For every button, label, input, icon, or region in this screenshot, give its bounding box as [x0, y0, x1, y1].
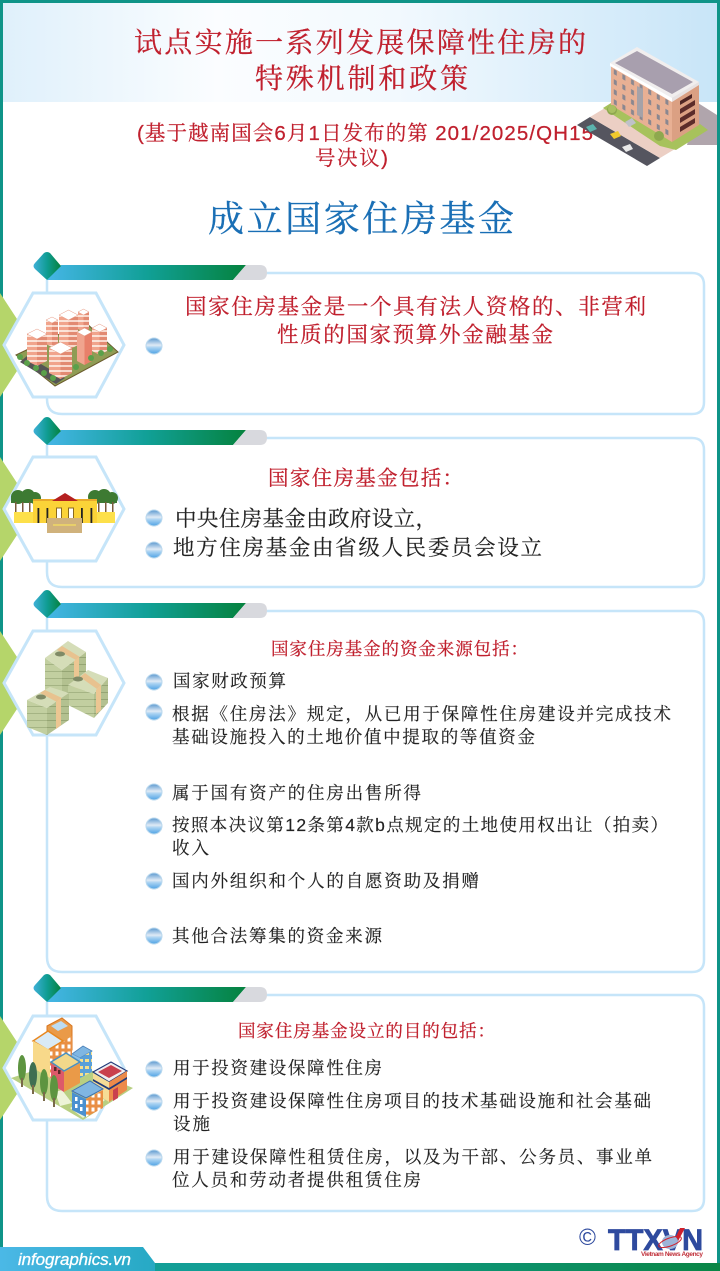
hexagon [4, 1016, 124, 1120]
section bar [34, 590, 267, 618]
heading text: 国家住房基金是一个具有法人资格的、非营利 [185, 290, 646, 321]
list: 按照本决议第12条第4款b点规定的土地使用权出让（拍卖） [172, 812, 668, 837]
title [134, 21, 586, 97]
list: 用于投资建设保障性住房 [173, 1055, 382, 1080]
icon: apartment building [577, 47, 717, 166]
hexagon [4, 457, 124, 561]
footer bar [0, 1263, 720, 1271]
heading text: 国家住房基金包括： [268, 461, 463, 491]
list: 根据《住房法》规定，从已用于保障性住房建设并完成技术 [172, 701, 671, 726]
list: 属于国有资产的住房出售所得 [172, 780, 421, 805]
icon: government building [11, 489, 118, 533]
green arrow [0, 457, 34, 561]
list [146, 502, 542, 562]
list: 位人员和劳动者提供租赁住房 [172, 1167, 421, 1192]
section bar [34, 252, 267, 280]
subtitle: 号决议) [315, 141, 388, 171]
subtitle [137, 116, 593, 171]
panel frame [47, 995, 704, 1211]
panel: legal status [0, 252, 704, 414]
panel: purposes [0, 974, 704, 1211]
list: 国家财政预算 [173, 668, 286, 693]
heading text [185, 290, 646, 349]
list: 地方住房基金由省级人民委员会设立 [173, 531, 542, 562]
logo: TTXVN: Vietnam News Agency [641, 1251, 703, 1258]
heading text: 国家住房基金的资金来源包括： [271, 636, 528, 661]
list: 设施 [173, 1111, 210, 1136]
hexagon [4, 631, 124, 735]
footer tab: infographics.vn [0, 1247, 155, 1271]
subtitle: (基于越南国会6月1日发布的第 201/2025/QH15 [137, 116, 593, 146]
list: 国内外组织和个人的自愿资助及捐赠 [172, 868, 479, 893]
heading text: 性质的国家预算外金融基金 [277, 318, 553, 349]
panel frame [47, 438, 704, 587]
section bar [34, 417, 267, 445]
bullet [146, 338, 162, 354]
list [146, 1055, 652, 1192]
footer tab: infographics.vn: infographics.vn [18, 1250, 131, 1269]
panel frame [47, 273, 704, 414]
icon: city blocks [16, 309, 118, 386]
list: 其他合法筹集的资金来源 [172, 923, 382, 948]
green arrow [0, 1016, 34, 1120]
list [146, 668, 671, 948]
copyright symbol: © [579, 1224, 596, 1250]
logo: TTXVN: TTXVN [608, 1224, 703, 1257]
panel: funding sources [0, 590, 704, 972]
list: 用于建设保障性租赁住房，以及为干部、公务员、事业单 [173, 1144, 652, 1169]
header banner [3, 3, 717, 102]
icon: cash stacks [27, 641, 108, 735]
green arrow [0, 631, 34, 735]
list: 用于投资建设保障性住房项目的技术基础设施和社会基础 [173, 1088, 651, 1113]
heading text: 国家住房基金设立的目的包括： [238, 1018, 495, 1043]
main heading: 成立国家住房基金 [208, 191, 514, 242]
panel: fund composition [0, 417, 704, 587]
title: 特殊机制和政策 [255, 57, 468, 97]
list: 收入 [172, 835, 210, 860]
icon: colourful buildings [11, 1018, 133, 1120]
title: 试点实施一系列发展保障性住房的 [134, 21, 586, 61]
hexagon [4, 293, 124, 397]
panel frame [47, 611, 704, 972]
list: 基础设施投入的土地价值中提取的等值资金 [172, 724, 535, 749]
green arrow [0, 293, 34, 397]
list: 中央住房基金由政府设立， [175, 502, 437, 533]
section bar [34, 974, 267, 1002]
